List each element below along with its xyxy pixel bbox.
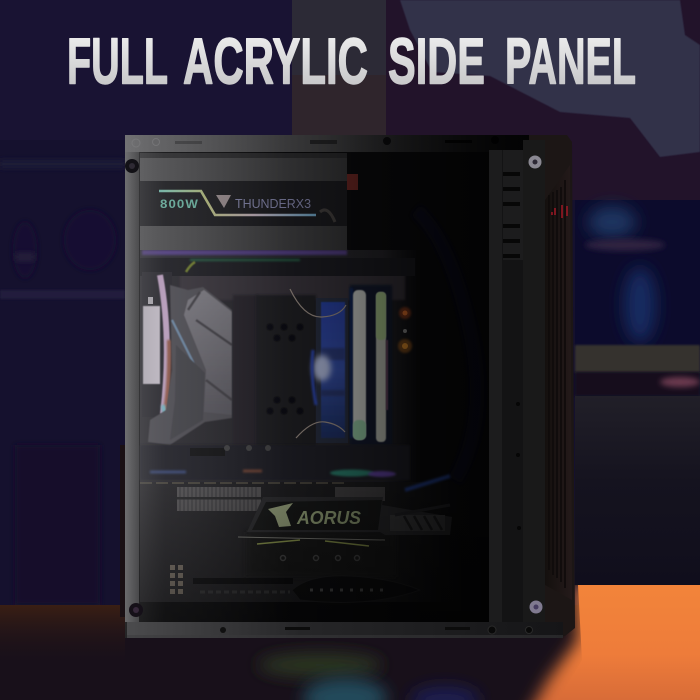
side panel vents xyxy=(545,165,572,600)
icon: AORUS eagle logo xyxy=(268,503,293,527)
title: SIDE xyxy=(388,24,485,98)
blue cooler fan xyxy=(312,298,348,443)
screws xyxy=(125,156,542,617)
icon: ThunderX3 logo xyxy=(216,195,231,208)
PC case xyxy=(125,135,575,638)
board capacitors xyxy=(170,565,183,594)
PSU brand text: THUNDERX3 xyxy=(235,197,311,211)
title: FULL xyxy=(67,24,168,98)
title: ACRYLIC xyxy=(183,24,368,98)
left bracket behind case xyxy=(120,445,126,617)
PSU wattage text: 800W xyxy=(160,197,199,211)
bottom frame bar xyxy=(127,622,563,638)
right cables xyxy=(395,210,477,515)
right pillar and vents xyxy=(489,140,545,635)
AORUS logo text: AORUS xyxy=(296,508,361,528)
thin cables xyxy=(290,289,346,438)
GPU xyxy=(238,497,452,577)
lower board xyxy=(140,482,460,602)
top frame bar xyxy=(125,135,529,152)
motherboard lower section xyxy=(140,445,410,480)
PCIe / heatsink fins xyxy=(140,483,385,511)
case side body xyxy=(528,135,575,638)
VRM heatsink xyxy=(148,285,232,445)
case interior base xyxy=(125,135,529,638)
RGB accent line xyxy=(159,191,316,215)
title xyxy=(67,24,636,98)
red PSU connector xyxy=(347,174,358,190)
PSU label strip xyxy=(140,181,347,226)
purple LED strip xyxy=(142,250,347,255)
glass tint xyxy=(125,135,529,638)
green LED strip xyxy=(190,259,300,261)
CPU cooler xyxy=(233,295,316,460)
PCIe slot and cable xyxy=(193,576,420,602)
rear fan with RGB ring xyxy=(142,272,172,417)
PSU shroud xyxy=(140,153,347,250)
table surface xyxy=(0,585,700,700)
chipset RGB glow xyxy=(150,470,396,477)
background shape: light wall panel xyxy=(400,0,700,157)
interior: motherboard xyxy=(140,250,416,490)
motherboard LEDs xyxy=(398,307,412,353)
RAM modules xyxy=(350,285,392,445)
left frame xyxy=(125,152,139,622)
